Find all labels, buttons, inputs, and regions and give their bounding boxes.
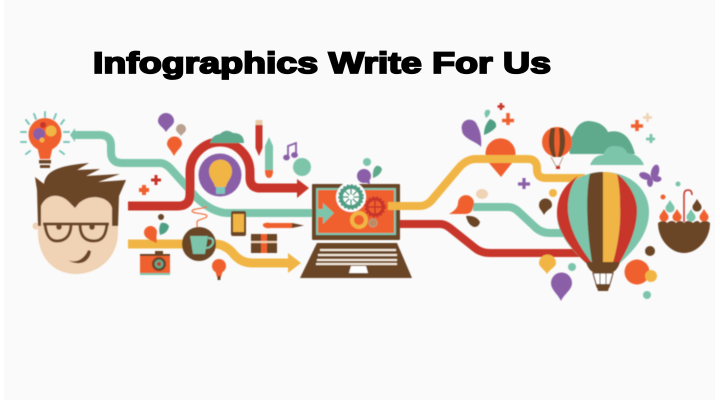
umbrella: [658, 182, 710, 253]
plus signs top right: [498, 103, 655, 189]
drops above arc: [158, 113, 186, 156]
glasses: [43, 224, 109, 241]
icon: camera: [140, 251, 170, 275]
icon: music note: [284, 143, 297, 160]
smile: [68, 250, 91, 263]
right teal path: [473, 207, 568, 233]
cloud above arc: [210, 131, 244, 143]
laptop base: [300, 243, 412, 278]
illustration: [21, 103, 710, 301]
yellow cog: [352, 213, 366, 227]
icon: gift box: [251, 234, 277, 253]
butterfly: [638, 164, 662, 187]
icon: teal pencil: [265, 137, 273, 178]
clouds: [569, 121, 644, 165]
yellow overlap band on orange drop: [476, 155, 528, 163]
small balloon: [542, 127, 572, 169]
red gear: [367, 199, 383, 215]
right yellow path: [388, 159, 585, 206]
drops mid right: [449, 189, 557, 227]
icon: coffee: [182, 206, 216, 261]
drops above camera: [144, 214, 169, 243]
face: [38, 190, 118, 274]
top right drops: [462, 110, 516, 177]
icon: phone: [231, 211, 246, 236]
yellow path with arrow: [128, 244, 301, 273]
teal path with arrow: [70, 128, 323, 213]
laptop: [300, 182, 412, 278]
icon: fountain pen: [263, 223, 304, 228]
icon: purple circle bulb: [198, 154, 242, 196]
small bulb drop: [212, 259, 226, 280]
red path with arrow: [128, 142, 309, 206]
icon: idea bulb: [21, 112, 69, 168]
hair: [35, 163, 126, 226]
right red path: [400, 224, 582, 253]
title: Infographics Write For Us: [93, 47, 551, 80]
man's head: [32, 163, 126, 274]
plus signs left: [139, 175, 161, 195]
icon: red pencil: [256, 120, 262, 156]
laptop drops: [357, 158, 382, 184]
large balloon: [557, 172, 649, 291]
teal circle: [293, 158, 311, 176]
drops and dots around balloon: [539, 246, 657, 301]
gear: [336, 182, 366, 212]
